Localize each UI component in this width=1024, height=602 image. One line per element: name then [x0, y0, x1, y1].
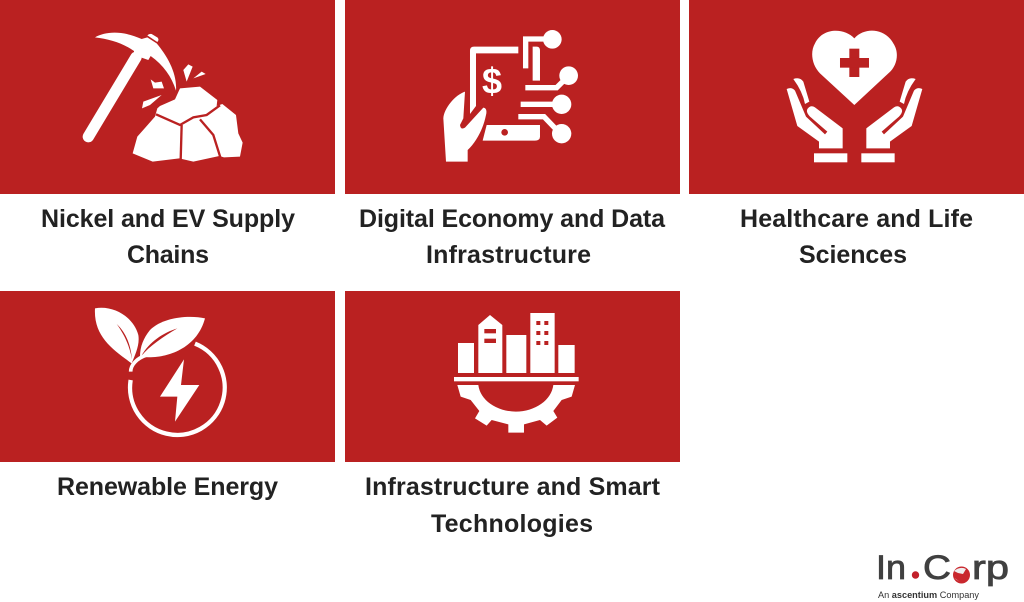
heading: digital economy and data infrastructure: Infrastructure [426, 241, 591, 269]
panel: nickel and EV supply chains [0, 0, 335, 194]
heading: renewable energy: Renewable Energy [57, 473, 278, 501]
heading: healthcare and life sciences: Healthcare and Life [740, 205, 973, 233]
logo: InCorp: An ascentium Company [878, 590, 979, 600]
heading: infrastructure and smart technologies: Technologies [431, 510, 593, 538]
icon: city on gear [454, 313, 579, 433]
icon: leaves and lightning ring [95, 308, 225, 435]
icon: hand holding phone with circuits: $ [482, 60, 502, 101]
heading: digital economy and data infrastructure [359, 205, 666, 269]
panel: healthcare and life sciences [689, 0, 1024, 194]
logo: InCorp: rp [972, 549, 1009, 587]
icon: pickaxe and rocks [88, 33, 243, 162]
heading: nickel and EV supply chains [41, 205, 295, 269]
heading: healthcare and life sciences: Sciences [799, 241, 907, 269]
panel: digital economy and data infrastructure [345, 0, 680, 194]
logo: InCorp: C [923, 549, 951, 587]
panel: renewable energy [0, 291, 335, 462]
icon: globe [953, 566, 970, 584]
heading: healthcare and life sciences [740, 205, 973, 269]
logo: InCorp: In [876, 549, 906, 587]
icon: hands holding heart [787, 31, 922, 162]
heading: nickel and EV supply chains: Chains [127, 241, 209, 269]
heading: nickel and EV supply chains: Nickel and EV Supply [41, 205, 295, 233]
panel: infrastructure and smart technologies [345, 291, 680, 462]
heading: digital economy and data infrastructure: Digital Economy and Data [359, 205, 666, 233]
logo: InCorp [876, 549, 1009, 600]
icon: hand holding phone with circuits [443, 30, 578, 162]
heading: infrastructure and smart technologies: Infrastructure and Smart [365, 473, 661, 501]
heading: infrastructure and smart technologies [365, 473, 661, 538]
